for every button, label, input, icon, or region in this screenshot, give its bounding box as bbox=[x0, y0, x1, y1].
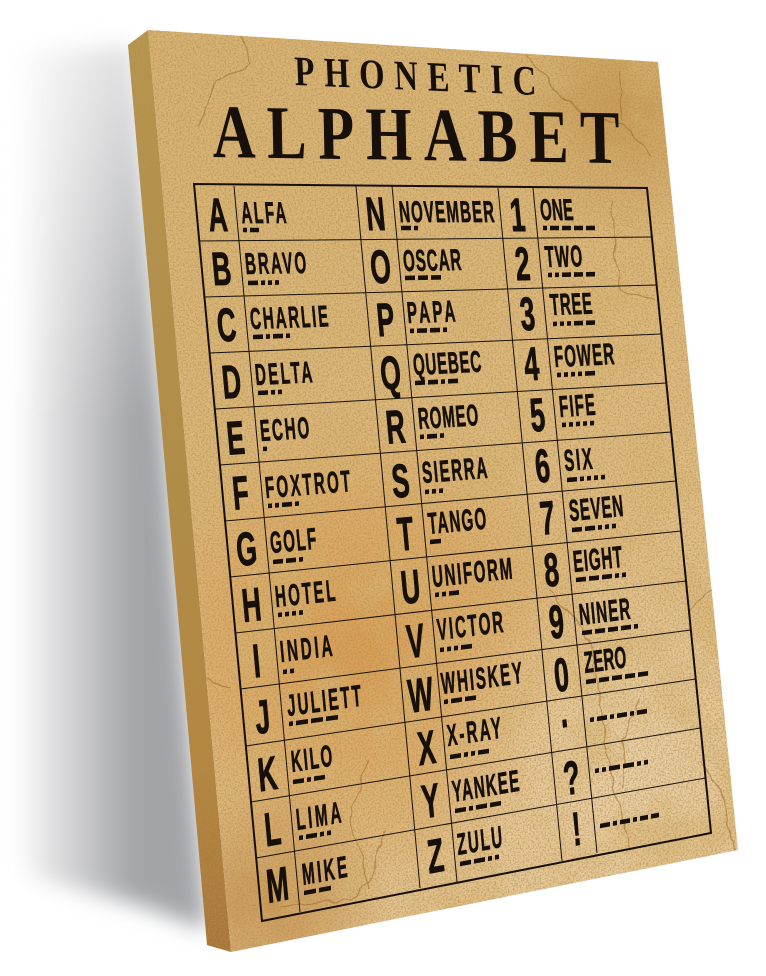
row: V Victor: VICTOR bbox=[436, 605, 505, 648]
row: X X-Ray: X-RAY bbox=[446, 711, 503, 754]
row: K Kilo: KILO bbox=[290, 739, 334, 780]
row: 1 One: 1 bbox=[508, 189, 527, 242]
row: M Mike bbox=[264, 850, 349, 914]
row: L Lima: LIMA bbox=[295, 796, 343, 838]
row: J Juliett bbox=[253, 679, 363, 745]
row: Y Yankee: Y bbox=[419, 774, 442, 830]
row: D Delta: D bbox=[220, 356, 244, 410]
row: 2 Two bbox=[513, 238, 595, 291]
row: U Uniform: U bbox=[399, 560, 423, 615]
row: G Golf: GOLF bbox=[269, 522, 318, 561]
row: 7 Seven: 7 bbox=[538, 492, 557, 546]
row: Q Quebec bbox=[378, 345, 483, 401]
row: A Alfa: ALFA bbox=[240, 197, 288, 231]
row: 4 Fower: 4 bbox=[522, 338, 542, 391]
row: I India: INDIA bbox=[279, 629, 334, 670]
title: ALPHABET: ALPHABET bbox=[212, 89, 620, 180]
row: F Foxtrot: F bbox=[230, 467, 251, 521]
row: 1 One: ONE bbox=[539, 194, 575, 228]
row: 8 Eight: 8 bbox=[542, 543, 561, 598]
row: W Whiskey bbox=[406, 656, 524, 724]
row: 9 Niner: 9 bbox=[547, 595, 566, 650]
row: M Mike: MIKE bbox=[301, 850, 349, 893]
row: 2 Two: TWO bbox=[544, 240, 584, 275]
row: 0 Zero bbox=[552, 641, 648, 703]
row: 5 Fife: FIFE bbox=[558, 388, 597, 425]
row: U Uniform: UNIFORM bbox=[431, 552, 514, 595]
row: L Lima bbox=[262, 796, 343, 857]
row: 6 Six: SIX bbox=[563, 442, 594, 479]
row: W Whiskey: W bbox=[406, 667, 436, 724]
row: 5 Fife bbox=[528, 388, 597, 443]
canvas side edge bbox=[128, 30, 231, 952]
row: L Lima: L bbox=[262, 802, 283, 857]
row: I India bbox=[251, 629, 334, 688]
row: 7 Seven bbox=[538, 489, 625, 546]
row: Y Yankee bbox=[419, 764, 521, 830]
drop shadow behind canvas bbox=[22, 45, 207, 930]
row: question mark: ? bbox=[561, 751, 582, 806]
row: 4 Fower: FOWER bbox=[553, 338, 616, 375]
row: 6 Six: 6 bbox=[533, 440, 552, 494]
row: V Victor: V bbox=[404, 614, 427, 669]
canvas panel bbox=[128, 30, 738, 952]
row: B Bravo: B bbox=[210, 243, 234, 296]
row: exclamation mark bbox=[570, 803, 659, 857]
row: question mark bbox=[561, 751, 648, 806]
row: J Juliett: J bbox=[253, 690, 272, 745]
row: R Romeo: ROMEO bbox=[417, 399, 480, 437]
row: J Juliett: JULIETT bbox=[286, 679, 363, 724]
row: I India: I bbox=[251, 635, 263, 688]
row: T Tango: TANGO bbox=[427, 502, 488, 542]
row: 0 Zero: ZERO bbox=[583, 641, 628, 681]
row: R Romeo bbox=[384, 399, 480, 455]
row: K Kilo: K bbox=[256, 747, 280, 803]
row: exclamation mark: ! bbox=[570, 803, 583, 857]
row: 6 Six bbox=[533, 440, 605, 494]
row: K Kilo bbox=[256, 739, 334, 803]
row: U Uniform bbox=[399, 552, 514, 615]
row: M Mike: M bbox=[264, 857, 291, 914]
row: E Echo: E bbox=[224, 412, 247, 466]
row: 4 Fower bbox=[522, 338, 616, 391]
row: Z Zulu bbox=[425, 820, 504, 885]
row: H Hotel bbox=[240, 574, 337, 633]
row: period bbox=[558, 685, 647, 739]
row: H Hotel: HOTEL bbox=[274, 574, 337, 615]
row: 8 Eight bbox=[542, 540, 626, 598]
row: N November: NOVEMBER bbox=[398, 196, 496, 230]
row: H Hotel: H bbox=[240, 578, 264, 633]
row: F Foxtrot: FOXTROT bbox=[264, 465, 352, 506]
row: 2 Two: 2 bbox=[513, 238, 532, 291]
canvas front parchment bbox=[148, 30, 738, 952]
row: D Delta: DELTA bbox=[254, 356, 314, 393]
row: A Alfa: A bbox=[206, 189, 230, 242]
row: P Papa: PAPA bbox=[406, 295, 457, 331]
row: 9 Niner: NINER bbox=[578, 592, 632, 633]
row: P Papa: P bbox=[374, 294, 397, 347]
row: C Charlie bbox=[215, 299, 330, 352]
row: V Victor bbox=[404, 605, 505, 669]
row: 0 Zero: 0 bbox=[552, 648, 571, 703]
row: N November bbox=[364, 188, 496, 241]
row: B Bravo: BRAVO bbox=[244, 246, 308, 282]
row: A Alfa bbox=[206, 189, 288, 242]
row: B Bravo bbox=[210, 243, 308, 296]
row: F Foxtrot bbox=[230, 465, 352, 521]
row: S Sierra bbox=[389, 451, 489, 509]
row: E Echo: ECHO bbox=[259, 411, 311, 449]
row: S Sierra: SIERRA bbox=[421, 451, 489, 491]
row: G Golf: G bbox=[234, 522, 259, 577]
row: 3 Tree bbox=[518, 287, 595, 341]
row: X X-Ray bbox=[415, 711, 503, 776]
row: Z Zulu: ZULU bbox=[456, 820, 504, 863]
row: T Tango: T bbox=[395, 507, 416, 562]
row: Y Yankee: YANKEE bbox=[451, 764, 521, 810]
row: X X-Ray: X bbox=[415, 721, 438, 776]
row: O Oscar: O bbox=[368, 241, 393, 294]
row: C Charlie: C bbox=[215, 299, 239, 352]
row: 9 Niner bbox=[547, 592, 638, 650]
table grid bbox=[194, 184, 711, 921]
row: O Oscar: OSCAR bbox=[402, 243, 463, 279]
row: Z Zulu: Z bbox=[425, 829, 446, 885]
row: T Tango bbox=[395, 502, 488, 562]
row: Q Quebec: QUEBEC bbox=[412, 345, 483, 383]
row: O Oscar bbox=[368, 241, 463, 294]
row: Q Quebec: Q bbox=[378, 347, 403, 401]
title: PHONETIC: PHONETIC bbox=[294, 48, 537, 105]
row: period: . bbox=[558, 685, 570, 739]
row: D Delta bbox=[220, 356, 314, 410]
row: E Echo bbox=[224, 411, 311, 466]
row: 1 One bbox=[508, 189, 595, 242]
row: P Papa bbox=[374, 294, 457, 347]
row: N November: N bbox=[364, 188, 388, 241]
row: 7 Seven: SEVEN bbox=[568, 489, 625, 529]
row: 5 Fife: 5 bbox=[528, 389, 547, 443]
row: S Sierra: S bbox=[389, 455, 412, 509]
row: 8 Eight: EIGHT bbox=[572, 540, 624, 580]
row: C Charlie: CHARLIE bbox=[249, 300, 330, 337]
row: R Romeo: R bbox=[384, 401, 408, 455]
row: G Golf bbox=[234, 522, 318, 577]
row: W Whiskey: WHISKEY bbox=[440, 656, 524, 702]
row: 3 Tree: 3 bbox=[518, 288, 537, 341]
row: 3 Tree: TREE bbox=[549, 287, 594, 323]
